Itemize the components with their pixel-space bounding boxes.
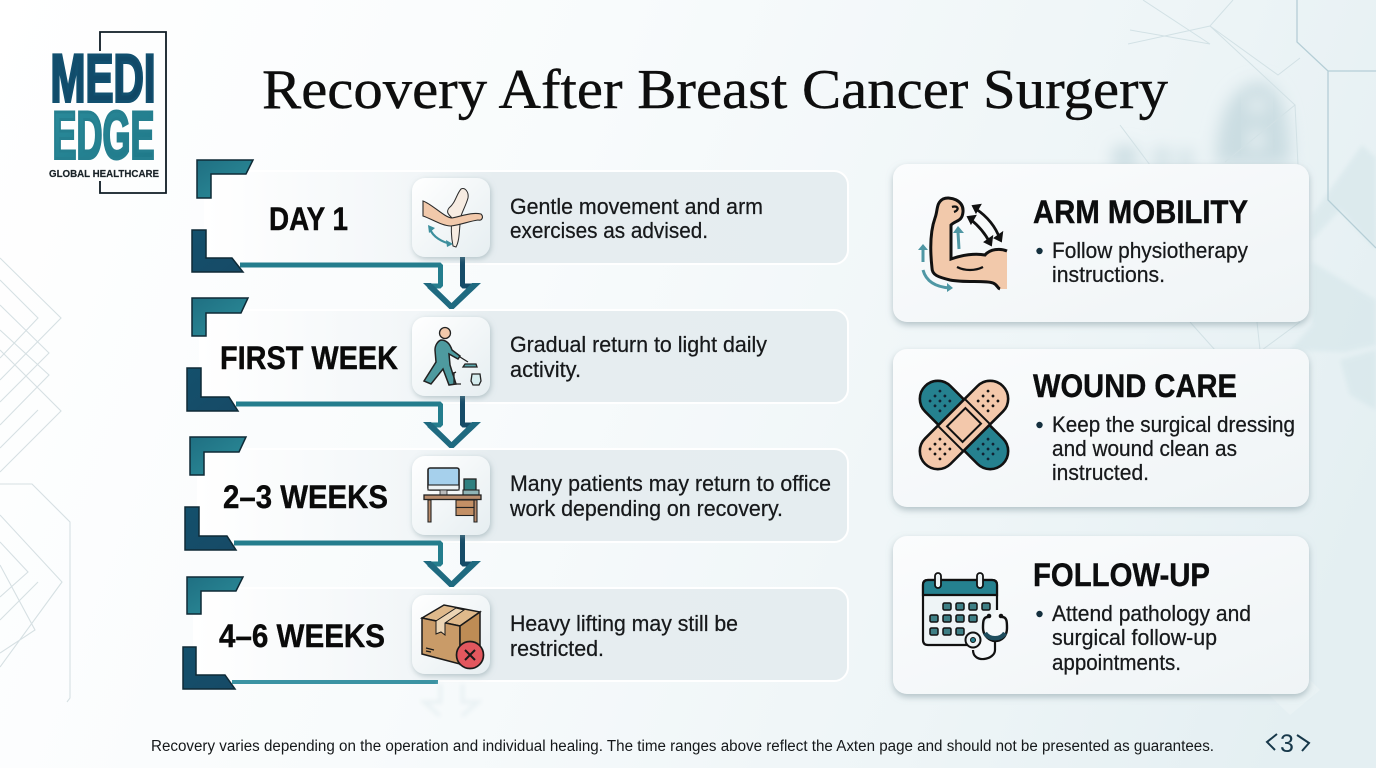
card 2 text: instructed. [1052, 460, 1149, 485]
row 4 background [194, 588, 848, 681]
card 1 text: Follow physiotherapy [1052, 238, 1248, 263]
row 2 description: activity. [510, 357, 581, 382]
card 3 text [1052, 601, 1251, 675]
row 2 background [200, 310, 848, 403]
logo: Medi Edge Global Healthcare: EDGE [52, 98, 154, 174]
row 4 description: Heavy lifting may still be [510, 611, 738, 636]
page number [1267, 730, 1309, 758]
card 2 text: Keep the surgical dressing [1052, 412, 1295, 437]
row 3 description: Many patients may return to office [510, 471, 831, 496]
logo: Medi Edge Global Healthcare [49, 32, 166, 193]
decorative background: top right [1112, 0, 1376, 715]
panel: row 1 day 1 [192, 160, 848, 311]
panel: row 3 2-3 weeks [185, 437, 848, 589]
icon: box with restriction mark [412, 595, 490, 674]
card 2 background [893, 349, 1309, 507]
icon: office desk [412, 456, 490, 535]
card 1 bullet [1036, 248, 1043, 254]
card 1 heading: ARM MOBILITY [1033, 194, 1248, 230]
row 2 description [510, 332, 767, 382]
row 3 brackets and connector [185, 437, 481, 589]
row 1 label: DAY 1 [269, 201, 348, 237]
logo: Medi Edge Global Healthcare: MEDI [50, 40, 156, 116]
page number: 3 [1280, 730, 1294, 758]
row 4 description [510, 611, 738, 661]
row 1 description: exercises as advised. [510, 218, 708, 243]
card 3 text: surgical follow-up [1052, 625, 1217, 650]
row 3 background [198, 449, 848, 542]
logo: Medi Edge Global Healthcare: GLOBAL HEALTHCARE [49, 168, 159, 180]
card 3 heading: FOLLOW-UP [1033, 557, 1210, 593]
row 3 label: 2–3 WEEKS [223, 479, 388, 515]
card 3 background [893, 536, 1309, 694]
row 4 description: restricted. [510, 636, 604, 661]
card 2 text: and wound clean as [1052, 436, 1237, 461]
row 1 brackets and connector [192, 160, 481, 311]
card 2 heading: WOUND CARE [1033, 368, 1237, 404]
row 2 label: FIRST WEEK [220, 340, 398, 376]
icon: person doing light chores [412, 317, 490, 396]
row 4 brackets and connector [183, 577, 478, 716]
icon: crossed bandages [912, 373, 1016, 477]
row 1 description: Gentle movement and arm [510, 194, 763, 219]
card 2 text [1052, 412, 1295, 485]
panel: follow-up [893, 536, 1309, 694]
card 1 background [893, 164, 1309, 322]
row 3 description: work depending on recovery. [509, 496, 783, 521]
panel: row 4 4-6 weeks [183, 577, 848, 716]
row 4 label: 4–6 WEEKS [219, 618, 385, 654]
card 3 bullet [1036, 611, 1043, 617]
row 2 brackets and connector [187, 298, 481, 450]
card 3 text: appointments. [1052, 650, 1181, 675]
row 1 description [510, 194, 763, 243]
decorative background: left line pattern [0, 258, 70, 702]
card 3 text: Attend pathology and [1052, 601, 1251, 626]
card 1 text: instructions. [1052, 262, 1165, 287]
panel: arm mobility [893, 164, 1309, 322]
card 2 bullet [1036, 422, 1043, 428]
icon: flexed arm [918, 198, 1007, 292]
icon: arm exercises [412, 178, 490, 257]
row 3 description [509, 471, 831, 521]
footer note: Recovery varies depending on the operation and individual healing. The time ranges above reflect the Axten page and should not be presented as guarantees. [151, 738, 1214, 755]
panel: row 2 first week [187, 298, 848, 450]
row 2 description: Gradual return to light daily [510, 332, 767, 357]
title: Recovery After Breast Cancer Surgery [262, 59, 1168, 121]
row 1 background [205, 171, 848, 264]
icon: calendar with stethoscope [923, 573, 1007, 659]
panel: wound care [893, 349, 1309, 507]
card 1 text [1052, 238, 1248, 287]
